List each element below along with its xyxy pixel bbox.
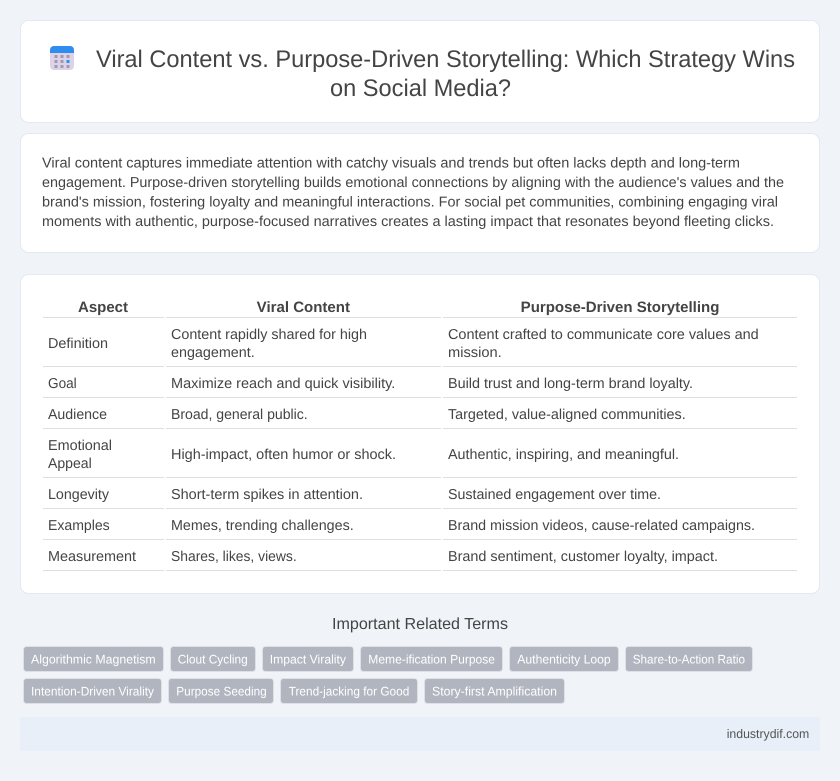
tag — [360, 646, 502, 672]
row: definition: engagement. — [171, 345, 255, 361]
row: emotional appeal: Emotional — [48, 438, 112, 454]
row: emotional appeal: High-impact, often humor or shock. — [171, 447, 396, 463]
row: audience — [48, 407, 686, 423]
row: goal — [48, 376, 693, 392]
row: measurement: Measurement — [48, 549, 136, 565]
row: audience: Broad, general public. — [171, 407, 308, 423]
row: measurement — [48, 549, 718, 565]
title text: on Social Media? — [330, 75, 511, 102]
row: examples: Examples — [48, 518, 110, 534]
row: goal: Maximize reach and quick visibility. — [171, 376, 395, 392]
tag — [262, 646, 354, 672]
row: goal: Build trust and long-term brand loyalty. — [448, 376, 693, 392]
tag — [424, 678, 564, 704]
table header: Purpose-Driven Storytelling — [521, 299, 719, 316]
tag: Story-first Amplification — [432, 684, 557, 698]
row: longevity — [48, 487, 661, 503]
tag — [24, 678, 162, 704]
tag — [280, 678, 418, 704]
row: emotional appeal: Authentic, inspiring, and meaningful. — [448, 447, 679, 463]
panel: title — [20, 20, 820, 122]
tag: Clout Cycling — [178, 652, 248, 666]
row: definition: mission. — [448, 345, 502, 361]
tag — [24, 646, 164, 672]
tag: Share-to-Action Ratio — [633, 652, 745, 666]
row: examples — [48, 518, 755, 534]
icon: calendar — [50, 46, 74, 70]
row: audience: Audience — [48, 407, 107, 423]
title text: Viral Content vs. Purpose-Driven Storytelling: Which Strategy Wins — [96, 46, 795, 73]
row: longevity: Longevity — [48, 487, 110, 503]
tag — [626, 646, 752, 672]
tag — [168, 678, 274, 704]
tag — [510, 646, 618, 672]
footer: industrydif.com — [727, 727, 809, 741]
row: definition: Content crafted to communicate core values and — [448, 327, 759, 343]
table header: Viral Content — [257, 299, 350, 316]
row: emotional appeal — [48, 438, 679, 472]
table header: Aspect — [78, 299, 128, 316]
panel: comparison table — [20, 274, 820, 594]
title text — [96, 46, 795, 102]
table header — [78, 299, 719, 316]
tag: Authenticity Loop — [517, 652, 611, 666]
tag: Impact Virality — [270, 652, 347, 666]
row: measurement: Shares, likes, views. — [171, 549, 297, 565]
row: definition: Definition — [48, 336, 108, 352]
panel: introduction paragraph: Viral content captures immediate attention with catchy visuals and trends but often lacks depth and long-term — [42, 156, 740, 172]
tag: Algorithmic Magnetism — [31, 652, 156, 666]
row: goal: Goal — [48, 376, 77, 392]
tag — [170, 646, 256, 672]
row: examples: Memes, trending challenges. — [171, 518, 354, 534]
row: definition — [48, 327, 759, 361]
heading: important related terms: Important Related Terms — [332, 616, 508, 633]
row: audience: Targeted, value-aligned communities. — [448, 407, 686, 423]
row: longevity: Short-term spikes in attention. — [171, 487, 363, 503]
footer — [20, 717, 820, 751]
row: measurement: Brand sentiment, customer loyalty, impact. — [448, 549, 718, 565]
tag: Purpose Seeding — [176, 684, 267, 698]
row: emotional appeal: Appeal — [48, 456, 92, 472]
row: examples: Brand mission videos, cause-related campaigns. — [448, 518, 755, 534]
panel: introduction paragraph: brand's mission, fostering loyalty and meaningful interactions. For social pet communities, combining engaging viral — [42, 194, 778, 210]
panel: introduction paragraph: moments with authentic, purpose-focused narratives creates a lasting impact that resonates beyond fleeting clicks. — [42, 214, 774, 230]
tag: Intention-Driven Virality — [31, 684, 155, 698]
related term tags — [24, 646, 752, 704]
tag: Trend-jacking for Good — [289, 684, 409, 698]
tag: Meme-ification Purpose — [368, 652, 495, 666]
row: longevity: Sustained engagement over time. — [448, 487, 661, 503]
row: definition: Content rapidly shared for high — [171, 327, 367, 343]
panel: introduction paragraph: engagement. Purpose-driven storytelling builds emotional connections by aligning with the audience's values and the — [42, 175, 784, 191]
panel: introduction paragraph — [20, 134, 820, 252]
